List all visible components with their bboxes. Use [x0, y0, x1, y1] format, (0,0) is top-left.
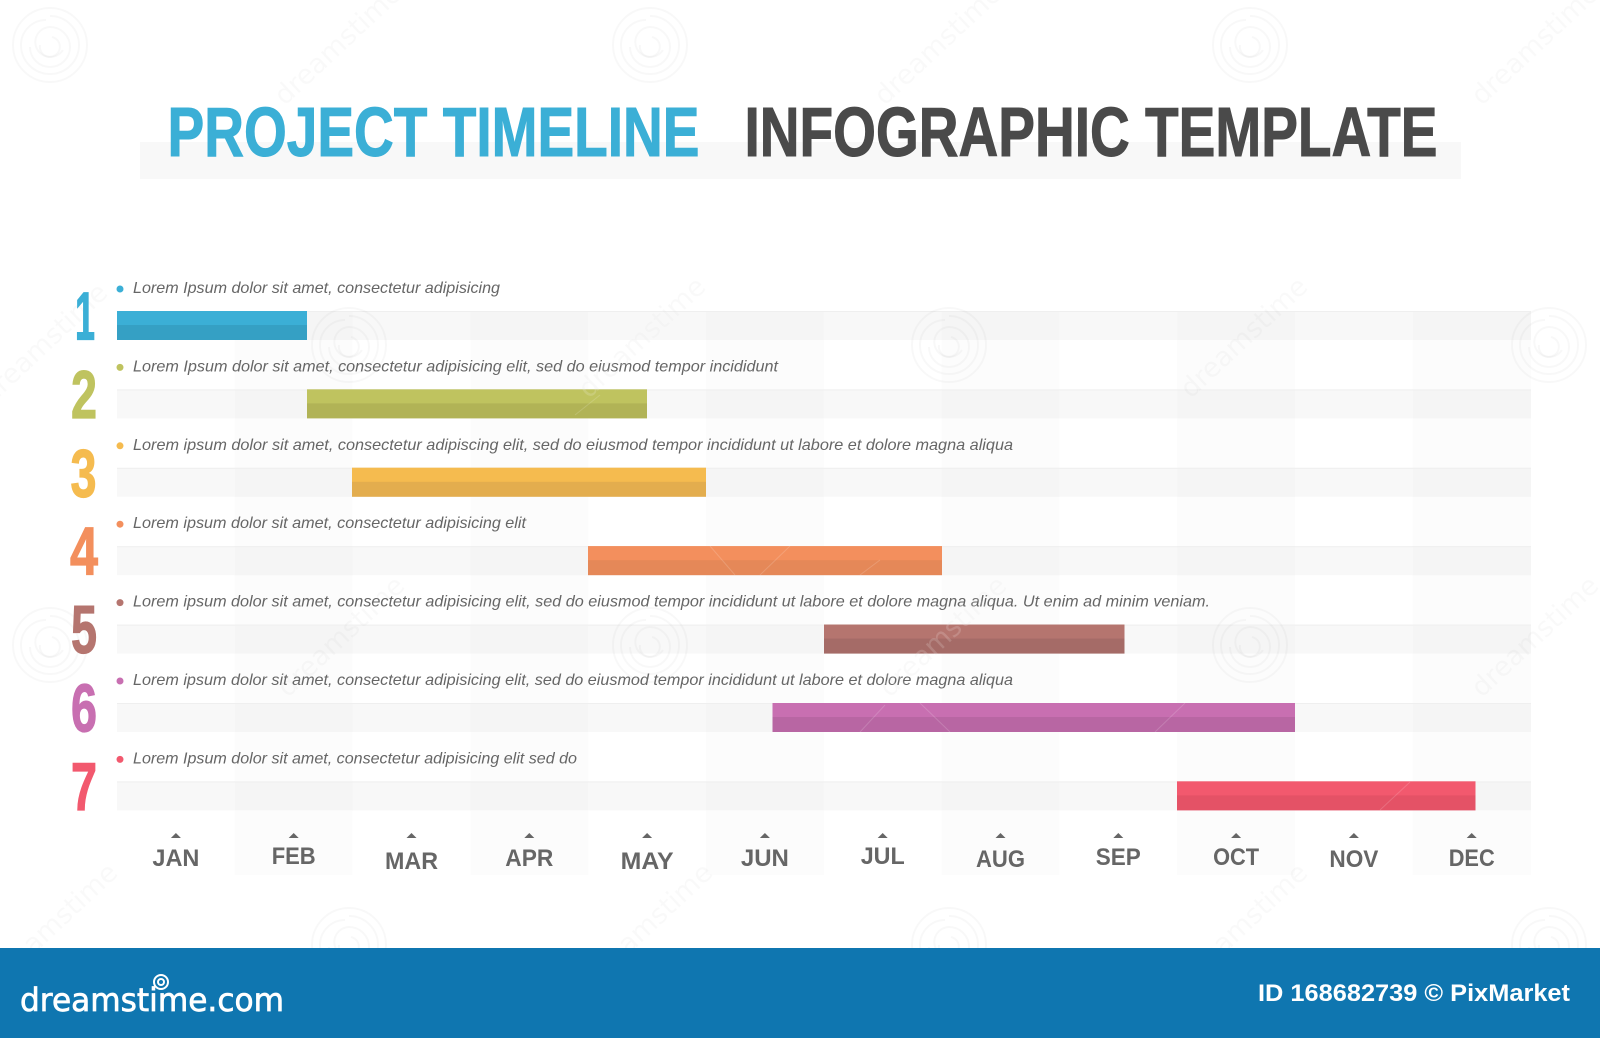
month labels: APR — [505, 845, 553, 872]
title — [168, 93, 1438, 171]
month labels: FEB — [272, 843, 316, 870]
footer id credit: ID 168682739 © PixMarket — [1258, 980, 1570, 1007]
bar 2 — [307, 389, 647, 418]
month labels: AUG — [976, 846, 1025, 873]
description 4: Lorem ipsum dolor sit amet, consectetur adipisicing elit — [133, 515, 527, 532]
month labels: MAY — [621, 848, 674, 875]
bullet 6 — [116, 678, 124, 684]
row 2 — [71, 357, 779, 433]
number 7: 7 — [71, 749, 97, 825]
bar 4 — [588, 546, 942, 575]
bullet 3 — [116, 442, 124, 449]
row 5 — [71, 592, 1210, 668]
description 2: Lorem Ipsum dolor sit amet, consectetur adipisicing elit, sed do eiusmod tempor incididunt — [133, 358, 779, 375]
row tracks — [117, 311, 1531, 810]
description 1: Lorem Ipsum dolor sit amet, consectetur adipisicing — [133, 280, 500, 297]
bullet 4 — [116, 521, 124, 528]
title: project timeline: PROJECT TIMELINE — [168, 93, 700, 171]
description 3: Lorem ipsum dolor sit amet, consectetur adipiscing elit, sed do eiusmod tempor incididunt ut labore et dolore magna aliqua — [133, 437, 1013, 454]
bar 6 — [772, 703, 1295, 732]
bar 7 — [1177, 781, 1476, 810]
number 4: 4 — [70, 514, 98, 590]
description 6: Lorem ipsum dolor sit amet, consectetur adipisicing elit, sed do eiusmod tempor incididunt ut labore et dolore magna aliqua — [133, 672, 1013, 689]
number 5: 5 — [71, 592, 97, 668]
bullet 5 — [116, 599, 124, 606]
bullet 2 — [116, 364, 124, 371]
bullet 1 — [116, 286, 124, 292]
month labels — [152, 843, 1495, 875]
bar 5 — [824, 625, 1124, 654]
month labels: NOV — [1329, 846, 1378, 873]
month column stripes — [235, 311, 1531, 875]
bar 1 — [117, 311, 307, 340]
month labels: JUN — [741, 845, 789, 872]
number 2: 2 — [71, 357, 97, 433]
footer logo: dreamstime.com — [20, 981, 284, 1019]
month labels: JUL — [861, 843, 905, 870]
description 5: Lorem ipsum dolor sit amet, consectetur adipisicing elit, sed do eiusmod tempor incididunt ut labore et dolore magna aliqua. Ut enim ad minim veniam. — [133, 594, 1210, 611]
month labels: MAR — [385, 848, 438, 875]
watermark over bars: dreamstime — [873, 570, 1013, 703]
row 6 — [71, 670, 1295, 746]
watermark over bars — [572, 271, 1410, 810]
month labels: SEP — [1096, 844, 1141, 871]
number 3: 3 — [70, 435, 96, 511]
title: infographic template: INFOGRAPHIC TEMPLATE — [744, 93, 1438, 171]
footer bar — [0, 948, 1600, 1038]
triangle markers — [171, 833, 1477, 838]
bar 3 — [352, 468, 706, 497]
number 1: 1 — [75, 278, 95, 354]
month labels: DEC — [1449, 845, 1495, 872]
title band — [140, 142, 1461, 179]
month labels: JAN — [152, 845, 199, 872]
description 7: Lorem Ipsum dolor sit amet, consectetur adipisicing elit sed do — [133, 750, 577, 767]
row 1 — [75, 278, 500, 354]
bullet 7 — [116, 756, 124, 763]
row 4 — [70, 514, 942, 590]
month axis — [152, 833, 1495, 875]
row 3 — [70, 435, 1013, 511]
row 7 — [71, 749, 1476, 825]
watermark over bars: dreamstime — [572, 271, 712, 404]
number 6: 6 — [71, 670, 97, 746]
month labels: OCT — [1213, 844, 1259, 871]
